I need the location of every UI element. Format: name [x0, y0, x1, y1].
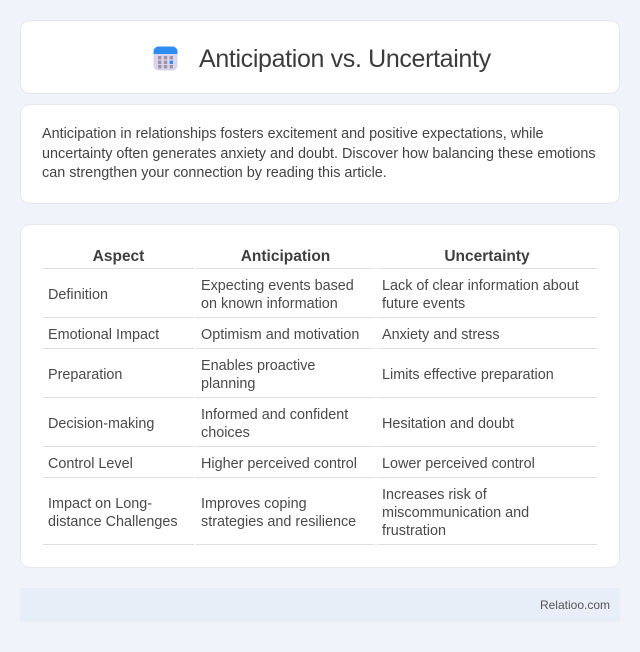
table header: Anticipation: Anticipation [241, 248, 330, 265]
Decision-making: anticipation: Informed and confident [201, 407, 348, 423]
table header: Uncertainty: Uncertainty [444, 248, 530, 265]
Definition: anticipation [201, 278, 354, 312]
panel: comparison table [20, 224, 620, 568]
intro text: can strengthen your connection by reading this article. [42, 165, 387, 181]
row: Definition: Definition [48, 287, 108, 303]
Preparation: uncertainty: Limits effective preparation [382, 367, 554, 383]
Decision-making: anticipation [201, 407, 348, 441]
Preparation: anticipation: planning [201, 376, 255, 392]
row: Impact on Long-distance Challenges: distance Challenges [48, 514, 178, 530]
intro text [42, 126, 596, 181]
Preparation: anticipation [201, 358, 315, 392]
footer brand: Relatioo.com [540, 598, 610, 612]
Definition: anticipation: on known information [201, 296, 338, 312]
Emotional Impact: uncertainty: Anxiety and stress [382, 327, 500, 343]
Definition: uncertainty: future events [382, 296, 465, 312]
panel: introduction [20, 104, 620, 204]
Control Level: anticipation: Higher perceived control [201, 456, 357, 472]
Impact: uncertainty: frustration [382, 523, 446, 539]
row: Impact on Long-distance Challenges [48, 496, 178, 530]
intro text: uncertainty often generates anxiety and doubt. Discover how balancing these emotions [42, 146, 596, 162]
Impact: anticipation [201, 496, 356, 530]
row: Preparation: Preparation [48, 367, 122, 383]
Impact: uncertainty: miscommunication and [382, 505, 529, 521]
Emotional Impact: anticipation: Optimism and motivation [201, 327, 359, 343]
Impact: anticipation: strategies and resilience [201, 514, 356, 530]
row: Decision-making: Decision-making [48, 416, 154, 432]
row: Emotional Impact: Emotional Impact [48, 327, 159, 343]
intro text: Anticipation in relationships fosters excitement and positive expectations, while [42, 126, 544, 142]
Definition: anticipation: Expecting events based [201, 278, 354, 294]
panel: title card [20, 20, 620, 94]
row: Control Level: Control Level [48, 456, 133, 472]
Impact: uncertainty: Increases risk of [382, 487, 487, 503]
row: Impact on Long-distance Challenges: Impact on Long- [48, 496, 152, 512]
table header: Aspect: Aspect [93, 248, 144, 265]
Definition: uncertainty [382, 278, 579, 312]
title: Anticipation vs. Uncertainty [199, 45, 491, 73]
Impact: anticipation: Improves coping [201, 496, 307, 512]
Control Level: uncertainty: Lower perceived control [382, 456, 535, 472]
footer bar [20, 588, 620, 622]
Definition: uncertainty: Lack of clear information about [382, 278, 579, 294]
Decision-making: anticipation: choices [201, 425, 250, 441]
Preparation: anticipation: Enables proactive [201, 358, 315, 374]
icon: calendar [154, 46, 178, 70]
Impact: uncertainty [382, 487, 529, 539]
Decision-making: uncertainty: Hesitation and doubt [382, 416, 514, 432]
